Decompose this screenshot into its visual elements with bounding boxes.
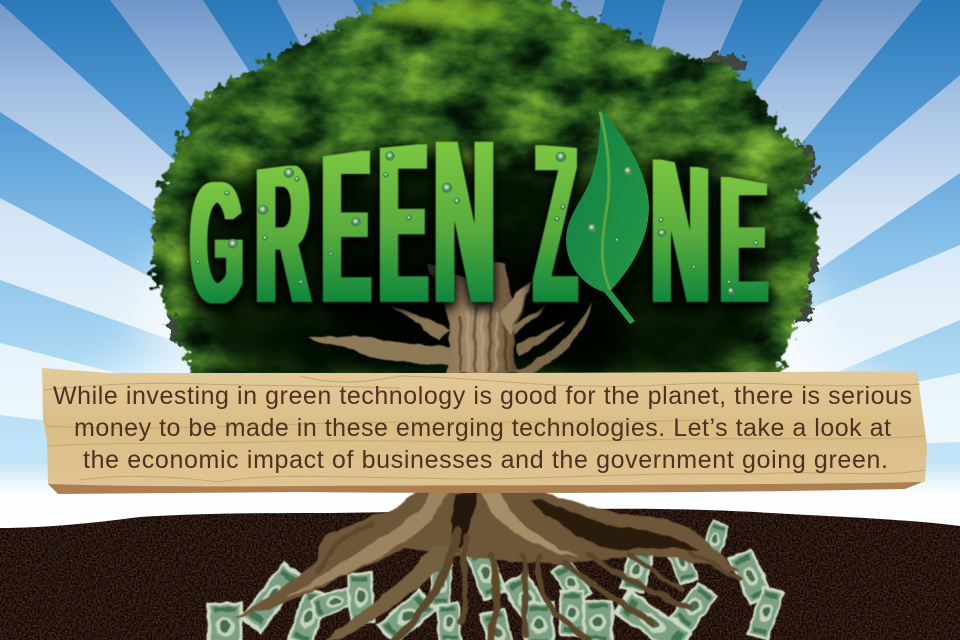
title letters: N — [434, 92, 495, 353]
plank underside — [48, 481, 925, 494]
plank face — [42, 368, 927, 486]
dark rim tufts behind canopy — [153, 54, 818, 343]
wood grain — [44, 376, 925, 482]
root mass — [233, 490, 739, 617]
water droplets — [196, 152, 758, 294]
right branches — [500, 282, 532, 335]
intro text: the economic impact of businesses and the government going green. — [83, 446, 888, 474]
highlights — [285, 492, 448, 598]
bright top highlight — [370, 0, 510, 26]
wooden plank with intro text — [42, 368, 927, 494]
dark core — [452, 492, 478, 552]
icon: leaf forming the letter O — [566, 108, 649, 324]
title letters: E — [322, 102, 370, 350]
title letters: N — [651, 113, 710, 347]
dark hollow behind title — [200, 168, 762, 378]
soil ground — [0, 509, 960, 640]
title letters: E — [379, 94, 427, 352]
title letters — [179, 138, 778, 318]
dollar bills among the roots — [207, 520, 785, 640]
lower root — [323, 545, 460, 640]
trunk streaks — [467, 300, 497, 372]
title letters: Z — [535, 95, 576, 351]
title letters: G — [191, 146, 243, 339]
title: GREEN ZONE — [179, 108, 778, 324]
intro text: While investing in green technology is good for the planet, there is serious — [53, 382, 912, 410]
title letters: E — [720, 134, 767, 342]
intro text: money to be made in these emerging technologies. Let’s take a look at — [74, 414, 891, 442]
left branches — [307, 335, 450, 365]
tree canopy — [152, 0, 820, 385]
tendrils — [318, 525, 740, 640]
intro text — [53, 382, 912, 474]
tree trunk and branches — [307, 262, 592, 376]
tree roots — [233, 490, 740, 640]
title letters: R — [256, 122, 310, 346]
